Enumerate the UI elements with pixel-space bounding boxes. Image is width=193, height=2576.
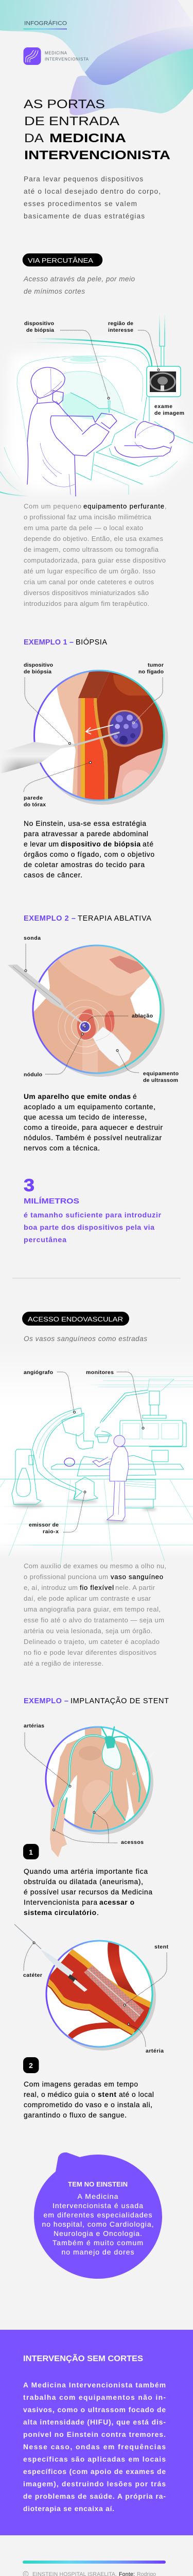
labels: illustration 1: exame bbox=[154, 403, 172, 410]
heading: exemplo 2 bbox=[24, 914, 151, 923]
text: step 2: comprometido do vaso e o instala ali, bbox=[24, 2101, 152, 2109]
labels: biopsy: dispositivo bbox=[24, 662, 53, 668]
callout bubble: tem no Einstein: em diferentes especialidades bbox=[43, 2211, 152, 2219]
lower vessel bbox=[68, 2022, 124, 2039]
labels: illustration 1: interesse bbox=[108, 327, 133, 333]
intro text: esses procedimentos se valem bbox=[24, 200, 137, 208]
stent mesh bbox=[84, 1965, 144, 2022]
text: ablation description: nódulos. Também é possível neutralizar bbox=[24, 1134, 162, 1142]
c-arm angiograph bbox=[12, 1408, 98, 1504]
stat: 3 milímetros bbox=[24, 1176, 161, 1244]
text: biopsy description: para atravessar a parede abdominal bbox=[24, 830, 148, 838]
leader lines bbox=[25, 944, 139, 1074]
body text: percutânea: diversos dispositivos miniaturizados são bbox=[24, 589, 149, 597]
pill: via percutânea bbox=[22, 253, 103, 267]
labels: stent bbox=[23, 1944, 169, 2054]
subtitle: acesso através da pele: Acesso através da pele, por meio bbox=[23, 275, 135, 283]
labels: biopsy: no fígado bbox=[138, 669, 164, 675]
body text: endovascular: até a região de interesse. bbox=[24, 1659, 103, 1667]
callout bubble: tem no Einstein: TEM NO EINSTEIN bbox=[68, 2180, 128, 2188]
text: step 1: obstruída ou dilatada (aneurisma), bbox=[24, 1878, 143, 1886]
labels: angiography: raio-x bbox=[43, 1529, 59, 1535]
leader lines: angiography bbox=[57, 1372, 144, 1532]
labels: circulatory: acessos bbox=[121, 1839, 144, 1845]
text: ablation description: que acessa um tecido de interesse, bbox=[24, 1113, 147, 1121]
body text: percutânea: computadorizada, para guiar esse dispositivo bbox=[24, 556, 166, 564]
panel text: dioterapia se encaixa aí. bbox=[23, 2505, 114, 2513]
labels: circulatory bbox=[24, 1723, 144, 1845]
ceiling lines bbox=[87, 1377, 193, 1387]
panel text: vasivos, como o ultrassom focado de bbox=[23, 2406, 166, 2414]
text: ablation description bbox=[24, 1093, 163, 1152]
body text: percutânea: Com um pequeno bbox=[24, 502, 81, 510]
labels: stent: artéria bbox=[146, 2048, 164, 2054]
callout bubble: tem no Einstein: no manejo de dores bbox=[62, 2248, 134, 2256]
body text: endovascular: artéria ou veia lesionada, seja um órgão. bbox=[24, 1627, 152, 1635]
labels: ablation: sonda bbox=[24, 935, 41, 941]
text: biopsy description: casos de câncer. bbox=[24, 871, 82, 879]
footer credits bbox=[23, 2571, 166, 2576]
patient figure bbox=[115, 421, 174, 457]
panel text: imagem), destruindo lesões por trás bbox=[23, 2480, 166, 2488]
title: AS PORTAS bbox=[24, 97, 105, 111]
labels: biopsy bbox=[24, 662, 164, 808]
text: ablation description: Um aparelho que emite ondas bbox=[24, 1093, 131, 1100]
arm and hand bbox=[50, 1798, 67, 1857]
stat: 3 milímetros: é tamanho suficiente para introduzir bbox=[24, 1211, 161, 1219]
labels: angiography: emissor de bbox=[29, 1522, 59, 1528]
labels: biopsy: tumor bbox=[148, 662, 164, 668]
body text: percutânea: em uma parte da pele — o local exato bbox=[24, 524, 143, 532]
text: step 1 bbox=[24, 1868, 152, 1917]
text: ablation description: acoplado a um equipamento cortante, bbox=[24, 1103, 155, 1111]
heading: exemplo 1 bbox=[24, 638, 107, 647]
step badge 1: 1 bbox=[29, 1848, 33, 1856]
body text: percutânea bbox=[24, 502, 167, 607]
text: step 2: até o local bbox=[119, 2091, 154, 2098]
probe bbox=[8, 964, 83, 1023]
logo text: INTERVENCIONISTA bbox=[45, 57, 89, 62]
stat: 3 milímetros: 3 bbox=[24, 1176, 34, 1195]
icon: logo square bbox=[24, 47, 41, 65]
labels: ablation: de ultrassom bbox=[143, 1077, 178, 1083]
callout bubble: tem no Einstein: Intervencionista é usada bbox=[52, 2201, 143, 2210]
monitor with CT scan bbox=[147, 366, 181, 397]
text: biopsy description bbox=[24, 820, 154, 879]
body text: endovascular: e, aí, introduz um bbox=[24, 1584, 78, 1591]
upper vessel bbox=[108, 1942, 138, 1999]
pill: acesso endovascular bbox=[22, 1312, 129, 1326]
body text: endovascular bbox=[24, 1562, 166, 1667]
title bbox=[24, 97, 170, 162]
callout bubble: tem no Einstein: no hospital, como Cardiologia, bbox=[42, 2220, 153, 2228]
illustration: angiography room bbox=[0, 1342, 193, 1566]
title: INTERVENCIONISTA bbox=[24, 148, 170, 162]
patient on table bbox=[51, 1450, 184, 1508]
callout bubble: tem no Einstein: Neurologia e Oncologia. bbox=[54, 2229, 142, 2238]
body text: endovascular: fio flexível bbox=[80, 1584, 114, 1591]
body text: endovascular: vaso sanguíneo bbox=[111, 1573, 163, 1581]
heading: exemplo 1: BIÓPSIA bbox=[76, 638, 107, 647]
body text: endovascular: esse fio até o alvo do tratamento — seja um bbox=[24, 1616, 164, 1624]
labels: circulatory: artérias bbox=[24, 1723, 44, 1729]
labels: illustration 1 bbox=[24, 320, 184, 416]
labels: ablation: nódulo bbox=[24, 1072, 42, 1078]
diagram: stent circle bbox=[14, 1924, 167, 2050]
decorative gradient blobs header bbox=[0, 0, 193, 115]
labels: illustration 1: região de bbox=[108, 320, 133, 327]
stat: 3 milímetros: percutânea bbox=[24, 1236, 66, 1244]
intro text: Para levar pequenos dispositivos bbox=[24, 175, 143, 183]
body text: endovascular: no fio e pode levar diferentes dispositivos bbox=[24, 1649, 156, 1656]
body text: percutânea: o profissional faz uma incisão milimétrica bbox=[24, 513, 152, 521]
labels: stent: catéter bbox=[23, 1972, 42, 1978]
nodule bbox=[79, 1021, 91, 1032]
diagram: biopsy circle bbox=[0, 670, 170, 805]
subtitle: acesso através da pele bbox=[23, 275, 135, 295]
labels: ablation: equipamento bbox=[143, 1071, 179, 1077]
text: ablation description: é bbox=[133, 1093, 137, 1100]
logo text bbox=[45, 50, 89, 62]
text: step 2: Com imagens geradas em tempo bbox=[24, 2080, 138, 2088]
panel: intervenção sem cortes bbox=[0, 2330, 193, 2535]
arteries bbox=[54, 1727, 140, 1830]
standing physician bbox=[93, 1435, 129, 1521]
body text: endovascular: Com auxílio de exames ou mesmo a olho nu, bbox=[24, 1562, 166, 1570]
labels: ablation bbox=[24, 935, 179, 1083]
panel text: específicas são aplicadas em locais bbox=[23, 2455, 166, 2463]
intro text: basicamente de duas estratégias bbox=[24, 212, 145, 220]
labels: illustration 1: de imagem bbox=[154, 410, 184, 416]
step badge 2 bbox=[23, 2057, 39, 2073]
panel text: trabalha com equipamentos não in- bbox=[23, 2394, 166, 2401]
callout bubble: tem no Einstein: Também é muito comum bbox=[52, 2239, 143, 2247]
body text: percutânea: de imagem, como ultrassom ou tomografia bbox=[24, 546, 159, 553]
text: biopsy description: até bbox=[143, 840, 153, 848]
body text: percutânea: equipamento perfurante bbox=[83, 502, 164, 510]
pill: acesso endovascular: ACESSO ENDOVASCULAR bbox=[28, 1316, 123, 1323]
text: step 2: real, o médico guia o bbox=[24, 2091, 95, 2098]
body text: endovascular: nele. A partir bbox=[115, 1584, 155, 1591]
stat: 3 milímetros: MILÍMETROS bbox=[24, 1197, 79, 1206]
panel text: alta intensidade (HIFU), que está dis- bbox=[23, 2418, 166, 2426]
text: biopsy description: e levar um bbox=[24, 840, 59, 848]
labels: biopsy: parede bbox=[24, 795, 43, 801]
leader lines bbox=[24, 1942, 167, 2047]
surgical lamp bbox=[95, 1390, 148, 1443]
title: DE ENTRADA bbox=[24, 114, 119, 128]
catheter bbox=[14, 1924, 87, 1992]
gradient bar bbox=[23, 2561, 166, 2564]
floor grid bbox=[0, 1479, 193, 1566]
needle device bbox=[108, 401, 110, 413]
body text: endovascular: daí, ele pode aplicar um contraste e usar bbox=[24, 1595, 151, 1602]
leader lines bbox=[25, 1733, 154, 1843]
text: step 2: stent bbox=[98, 2091, 116, 2098]
leader lines: illustration 1 bbox=[60, 330, 160, 399]
logo text: MEDICINA bbox=[45, 50, 67, 56]
icon: ceiling pole bbox=[160, 314, 165, 367]
pill: via percutânea: VIA PERCUTÂNEA bbox=[28, 257, 94, 264]
leader lines bbox=[24, 677, 163, 792]
body text: percutânea: cria um canal por onde cateteres e outros bbox=[24, 578, 154, 586]
heading: exemplo 2: EXEMPLO 2 – bbox=[24, 914, 76, 923]
body text: endovascular: Delineado o trajeto, um cateter é acoplado bbox=[24, 1638, 160, 1646]
labels: angiography bbox=[24, 1369, 114, 1535]
stat: 3 milímetros: boa parte dos dispositivos pela via bbox=[24, 1224, 154, 1232]
text: step 1: é possível usar recursos da Medicina bbox=[24, 1888, 152, 1896]
heart bbox=[102, 1736, 121, 1769]
kicker: infográfico bbox=[24, 20, 67, 29]
body text: percutânea: depende do objetivo. Então, ele usa exames bbox=[24, 535, 164, 543]
ceiling mount and monitors bbox=[120, 1379, 186, 1447]
labels: biopsy: do tórax bbox=[24, 802, 46, 808]
body text: percutânea: até um lugar específico de um órgão. Isso bbox=[24, 567, 155, 575]
kicker: infográfico: INFOGRÁFICO bbox=[24, 20, 67, 27]
labels: illustration 1: dispositivo bbox=[24, 320, 54, 327]
ultrasound device bbox=[93, 1027, 131, 1066]
panel text bbox=[23, 2381, 166, 2513]
text: step 2 bbox=[24, 2080, 154, 2119]
body text: percutânea: introduzidos para algum fim terapêutico. bbox=[24, 600, 149, 607]
text: biopsy description: No Einstein, usa-se essa estratégia bbox=[24, 820, 146, 827]
panel text: de problemas de saúde. A própria ra- bbox=[23, 2493, 166, 2500]
text: step 2: garantindo o fluxo de sangue. bbox=[24, 2111, 127, 2119]
body text: endovascular: uma angiografia para guiar, em tempo real, bbox=[24, 1605, 161, 1613]
heading: exemplo stent: EXEMPLO – bbox=[24, 1697, 68, 1705]
shadows bbox=[13, 1500, 156, 1523]
text: ablation description: como a tireoide, para aquecer e destruir bbox=[24, 1124, 163, 1131]
heading: exemplo 2: TERAPIA ABLATIVA bbox=[78, 914, 151, 923]
labels: illustration 1: de biópsia bbox=[26, 327, 54, 333]
heading: exemplo stent: IMPLANTAÇÃO DE STENT bbox=[71, 1697, 169, 1705]
labels: ablation: ablação bbox=[132, 1013, 153, 1019]
step badge 2: 2 bbox=[29, 2061, 33, 2070]
body text: percutânea: , bbox=[165, 502, 167, 510]
illustration: percutaneous biopsy room bbox=[0, 314, 193, 496]
artery bbox=[46, 1951, 152, 2032]
heading: exemplo stent bbox=[24, 1697, 169, 1705]
heading: exemplo 1: EXEMPLO 1 – bbox=[24, 638, 74, 647]
logo: medicina intervencionista bbox=[24, 47, 89, 65]
text: step 1: Intervencionista para bbox=[24, 1899, 97, 1906]
text: biopsy description: de coletar amostras do tecido para bbox=[24, 861, 145, 869]
title: MEDICINA bbox=[49, 131, 126, 145]
subtitle: vasos sanguíneos: Os vasos sanguíneos como estradas bbox=[24, 1335, 147, 1343]
subtitle: acesso através da pele: de mínimos cortes bbox=[24, 287, 85, 295]
title: DA bbox=[24, 131, 44, 145]
labels: biopsy: de biópsia bbox=[24, 669, 51, 675]
diagram: circulatory system bbox=[25, 1723, 154, 1857]
panel text: A Medicina Intervencionista também bbox=[23, 2381, 166, 2389]
body text: endovascular: o profissional punciona um bbox=[24, 1573, 108, 1581]
doctor figure bbox=[27, 367, 117, 496]
labels: angiography: angiógrafo bbox=[24, 1369, 53, 1376]
panel text: específicos (com apoio de exames de bbox=[23, 2468, 166, 2476]
intro text bbox=[24, 175, 161, 220]
tumor bbox=[108, 710, 143, 747]
text: step 1: . bbox=[97, 1909, 99, 1917]
callout bubble: tem no Einstein: A Medicina bbox=[77, 2192, 118, 2200]
text: biopsy description: órgãos como o fígado, com o objetivo bbox=[24, 851, 154, 858]
diagram: thyroid ablation circle bbox=[8, 943, 165, 1077]
callout bubble: tem no Einstein bbox=[34, 2153, 162, 2279]
text: step 1: acessar o bbox=[99, 1899, 134, 1906]
panel text: Nesse caso, ondas em frequências bbox=[23, 2443, 166, 2451]
biopsy needle instrument bbox=[0, 742, 74, 775]
text: biopsy description: dispositivo de biópsia bbox=[61, 840, 141, 848]
intro text: até o local desejado dentro do corpo, bbox=[24, 188, 161, 195]
text: step 1: sistema circulatório bbox=[24, 1909, 96, 1917]
panel heading: INTERVENÇÃO SEM CORTES bbox=[23, 2354, 143, 2363]
panel text: ponível no Einstein contra tremores. bbox=[23, 2431, 166, 2438]
icon: copyright bbox=[23, 2571, 28, 2576]
step badge 1 bbox=[23, 1844, 39, 1859]
text: step 1: Quando uma artéria importante fica bbox=[24, 1868, 148, 1875]
labels: stent: stent bbox=[154, 1944, 169, 1950]
labels: angiography: monitores bbox=[86, 1369, 114, 1376]
text: ablation description: nervos com a técnica. bbox=[24, 1144, 100, 1152]
